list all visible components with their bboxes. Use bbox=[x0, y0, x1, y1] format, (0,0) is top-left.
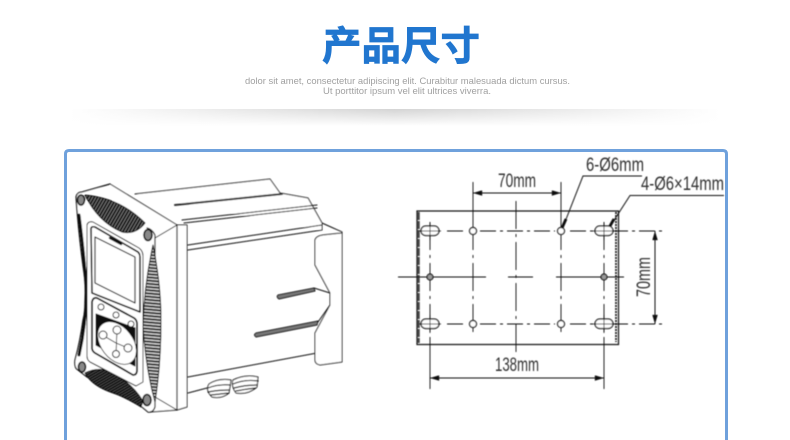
dimension labels bbox=[495, 155, 724, 376]
label: horizontal hole spacing: 70mm bbox=[498, 171, 536, 192]
subtitle text bbox=[245, 76, 570, 97]
subtitle text: dolor sit amet, consectetur adipiscing elit. Curabitur malesuada dictum cursus. bbox=[245, 76, 570, 87]
dimension lines bbox=[430, 193, 655, 378]
technical drawing: mounting plate bbox=[398, 176, 724, 389]
keypad bbox=[90, 298, 144, 375]
front bezel side bbox=[110, 184, 187, 412]
plate outline bbox=[417, 211, 618, 344]
panel: product dimensions frame bbox=[66, 150, 726, 440]
leader lines bbox=[562, 176, 724, 228]
top grip bbox=[85, 195, 145, 233]
label: slotted holes: 4-Ø6×14mm bbox=[641, 174, 724, 195]
display frame bbox=[87, 222, 143, 386]
front face outline bbox=[75, 184, 155, 412]
bracket slots bbox=[254, 288, 318, 337]
label: vertical hole spacing: 70mm bbox=[634, 257, 655, 297]
side grip bbox=[143, 245, 161, 402]
subtitle text: Ut porttitor ipsum vel elit ultrices viverra. bbox=[323, 86, 491, 97]
round holes bbox=[427, 228, 607, 328]
plate right edge bbox=[615, 212, 617, 342]
label: round holes: 6-Ø6mm bbox=[586, 155, 644, 176]
cable glands bbox=[208, 376, 258, 398]
face edge shading bbox=[79, 215, 86, 355]
label: overall width: 138mm bbox=[495, 355, 539, 376]
corner screws bbox=[78, 195, 152, 406]
housing body bbox=[135, 179, 322, 393]
plate left edge bbox=[417, 212, 420, 343]
bottom grip bbox=[85, 369, 143, 407]
title: 产品尺寸 bbox=[322, 25, 480, 69]
header shadow band bbox=[70, 109, 720, 126]
mounting bracket bbox=[314, 223, 342, 365]
slotted holes bbox=[419, 222, 615, 333]
centre lines bbox=[398, 182, 665, 389]
device illustration: isometric product view bbox=[75, 179, 342, 412]
